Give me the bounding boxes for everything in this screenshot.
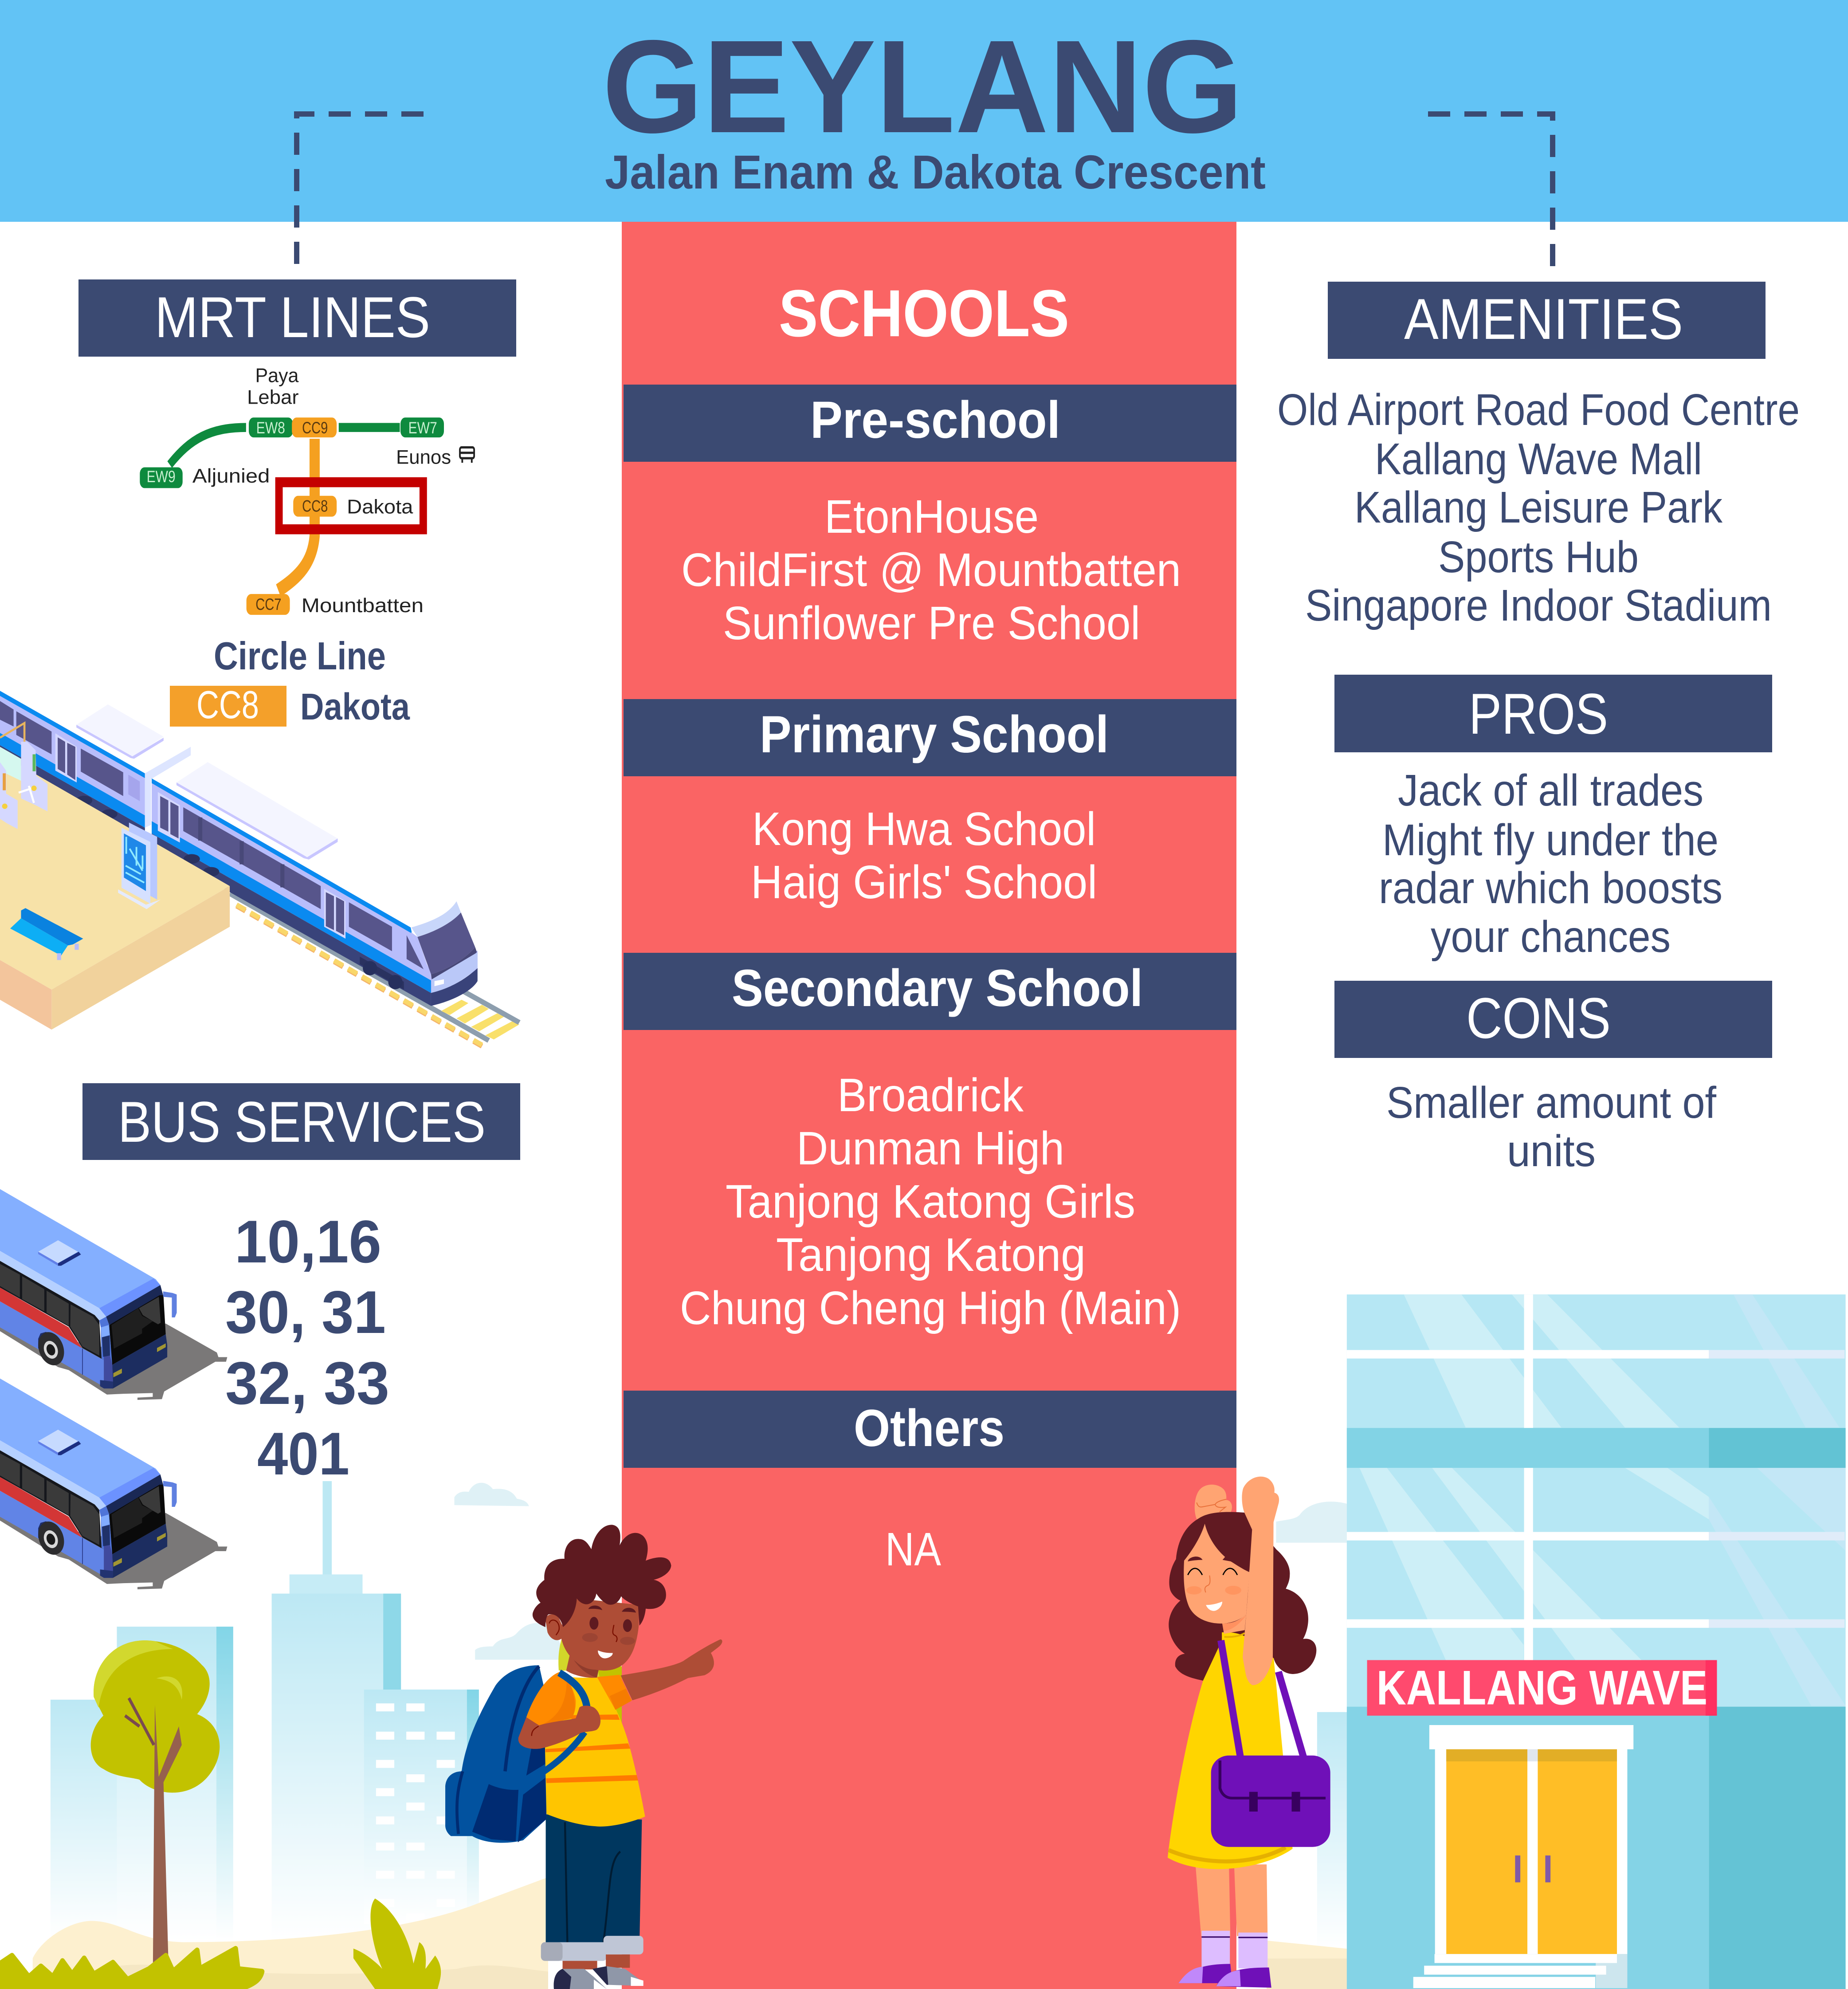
- MRT map: Paya: [255, 365, 299, 387]
- MRT map: CC8: [302, 497, 328, 515]
- pros list: radar which boosts: [1379, 863, 1722, 913]
- primary school list: Haig Girls' School: [751, 856, 1097, 908]
- glass upper: [1347, 1294, 1846, 1707]
- legs, dress and straps: [1168, 1632, 1303, 1988]
- title: GEYLANG: [602, 13, 1243, 161]
- illustration: kallang wave building: [1267, 1294, 1846, 1989]
- pre-school list: [681, 491, 1181, 649]
- cons list: [1386, 1078, 1716, 1176]
- secondary school list: [680, 1069, 1181, 1334]
- primary school list: Kong Hwa School: [752, 803, 1096, 855]
- MRT map: EW9: [147, 468, 176, 486]
- MRT map: Lebar: [247, 386, 298, 409]
- pre-school list: EtonHouse: [824, 491, 1039, 543]
- pre-school bar: Pre-school: [810, 391, 1060, 449]
- pre-school list: Sunflower Pre School: [723, 597, 1140, 649]
- MRT map: EW8: [256, 419, 285, 437]
- pros list: [1379, 766, 1722, 962]
- bus numbers: 401: [257, 1420, 349, 1487]
- MRT map: CC7: [255, 595, 281, 613]
- schools heading: SCHOOLS: [779, 276, 1069, 350]
- city skyline and ground: [33, 1481, 567, 1989]
- subtitle: Jalan Enam & Dakota Crescent: [605, 145, 1266, 199]
- secondary school list: Tanjong Katong Girls: [726, 1175, 1135, 1228]
- facade bands: [1347, 1428, 1846, 1989]
- face and raised arm: [1184, 1477, 1279, 1685]
- bus numbers: 10,16: [235, 1208, 381, 1275]
- door: [1413, 1725, 1633, 1988]
- heading: pros: PROS: [1469, 681, 1608, 746]
- secondary school list: Broadrick: [837, 1069, 1024, 1121]
- pre-school list: ChildFirst @ Mountbatten: [681, 544, 1181, 596]
- primary school bar: [624, 699, 1236, 776]
- heading: MRT lines: MRT LINES: [155, 285, 430, 350]
- others bar: Others: [854, 1399, 1004, 1458]
- illustration: train and platform: [0, 691, 519, 1046]
- bench: [10, 908, 83, 960]
- amenities list: Old Airport Road Food Centre: [1277, 385, 1800, 435]
- bus numbers: 32, 33: [225, 1349, 389, 1417]
- back hand and hair: [1169, 1485, 1316, 1681]
- heading: amenities: [1328, 282, 1766, 359]
- sign: KALLANG WAVE: [1377, 1661, 1707, 1715]
- secondary school list: Dunman High: [796, 1122, 1064, 1175]
- window frames: [1347, 1294, 1844, 1661]
- dashed connector left: [297, 114, 424, 271]
- MRT map: Mountbatten: [302, 594, 424, 617]
- bus numbers: 30, 31: [225, 1278, 386, 1346]
- icon: bus top: [0, 1189, 227, 1400]
- header: [0, 0, 1848, 222]
- amenities list: Singapore Indoor Stadium: [1305, 581, 1772, 630]
- MRT map: EW7: [408, 419, 437, 437]
- illustration: boy with backpack: [445, 1525, 722, 1989]
- pros list: your chances: [1431, 912, 1671, 962]
- illustration: girl with purple bag: [1168, 1477, 1330, 1988]
- pros list: Jack of all trades: [1398, 766, 1703, 815]
- others bar: [624, 1391, 1236, 1468]
- legs and shoes: [541, 1814, 643, 1989]
- amenities list: Kallang Wave Mall: [1375, 434, 1702, 484]
- others list: NA: [885, 1523, 941, 1576]
- MRT map: CC9: [302, 419, 328, 437]
- heading: pros: [1334, 675, 1772, 752]
- heading: cons: CONS: [1466, 986, 1611, 1050]
- primary school list: [751, 803, 1097, 908]
- amenities list: Sports Hub: [1438, 532, 1639, 582]
- MRT map: Eunos: [396, 446, 451, 468]
- cons list: units: [1507, 1126, 1596, 1176]
- circle line label: Circle Line: [214, 634, 386, 678]
- secondary school list: Chung Cheng High (Main): [680, 1282, 1181, 1334]
- station code badge: CC8: [196, 683, 259, 727]
- torso and head: [445, 1525, 722, 1843]
- heading: MRT lines: [78, 279, 516, 357]
- secondary school bar: [624, 953, 1236, 1030]
- station code badge: [170, 683, 286, 727]
- icon: bus bottom: [0, 1379, 227, 1589]
- amenities list: [1277, 385, 1800, 630]
- pros list: Might fly under the: [1382, 815, 1719, 865]
- front carriage: [152, 762, 478, 1006]
- cons list: Smaller amount of: [1386, 1078, 1716, 1128]
- MRT map: [140, 365, 474, 617]
- primary school bar: Primary School: [760, 705, 1109, 764]
- MRT map: Dakota: [347, 496, 413, 518]
- bus numbers: [225, 1208, 389, 1487]
- heading: cons: [1334, 981, 1772, 1058]
- amenities list: Kallang Leisure Park: [1354, 483, 1723, 532]
- dashed connector right: [1428, 114, 1553, 271]
- platform: [0, 754, 230, 1030]
- map sign: [118, 822, 161, 909]
- heading: amenities: AMENITIES: [1404, 287, 1683, 351]
- secondary school bar: Secondary School: [732, 959, 1143, 1018]
- station name: Dakota: [300, 686, 410, 727]
- pre-school bar: [624, 385, 1236, 462]
- MRT map: Aljunied: [192, 465, 270, 487]
- illustration: tree and bushes: [0, 1640, 441, 1989]
- turnstiles: [0, 723, 47, 829]
- rear carriage: [0, 691, 191, 837]
- purple bag: [1211, 1756, 1330, 1847]
- panel: schools column: [622, 220, 1236, 1989]
- heading: bus services: BUS SERVICES: [118, 1089, 486, 1154]
- secondary school list: Tanjong Katong: [776, 1229, 1086, 1281]
